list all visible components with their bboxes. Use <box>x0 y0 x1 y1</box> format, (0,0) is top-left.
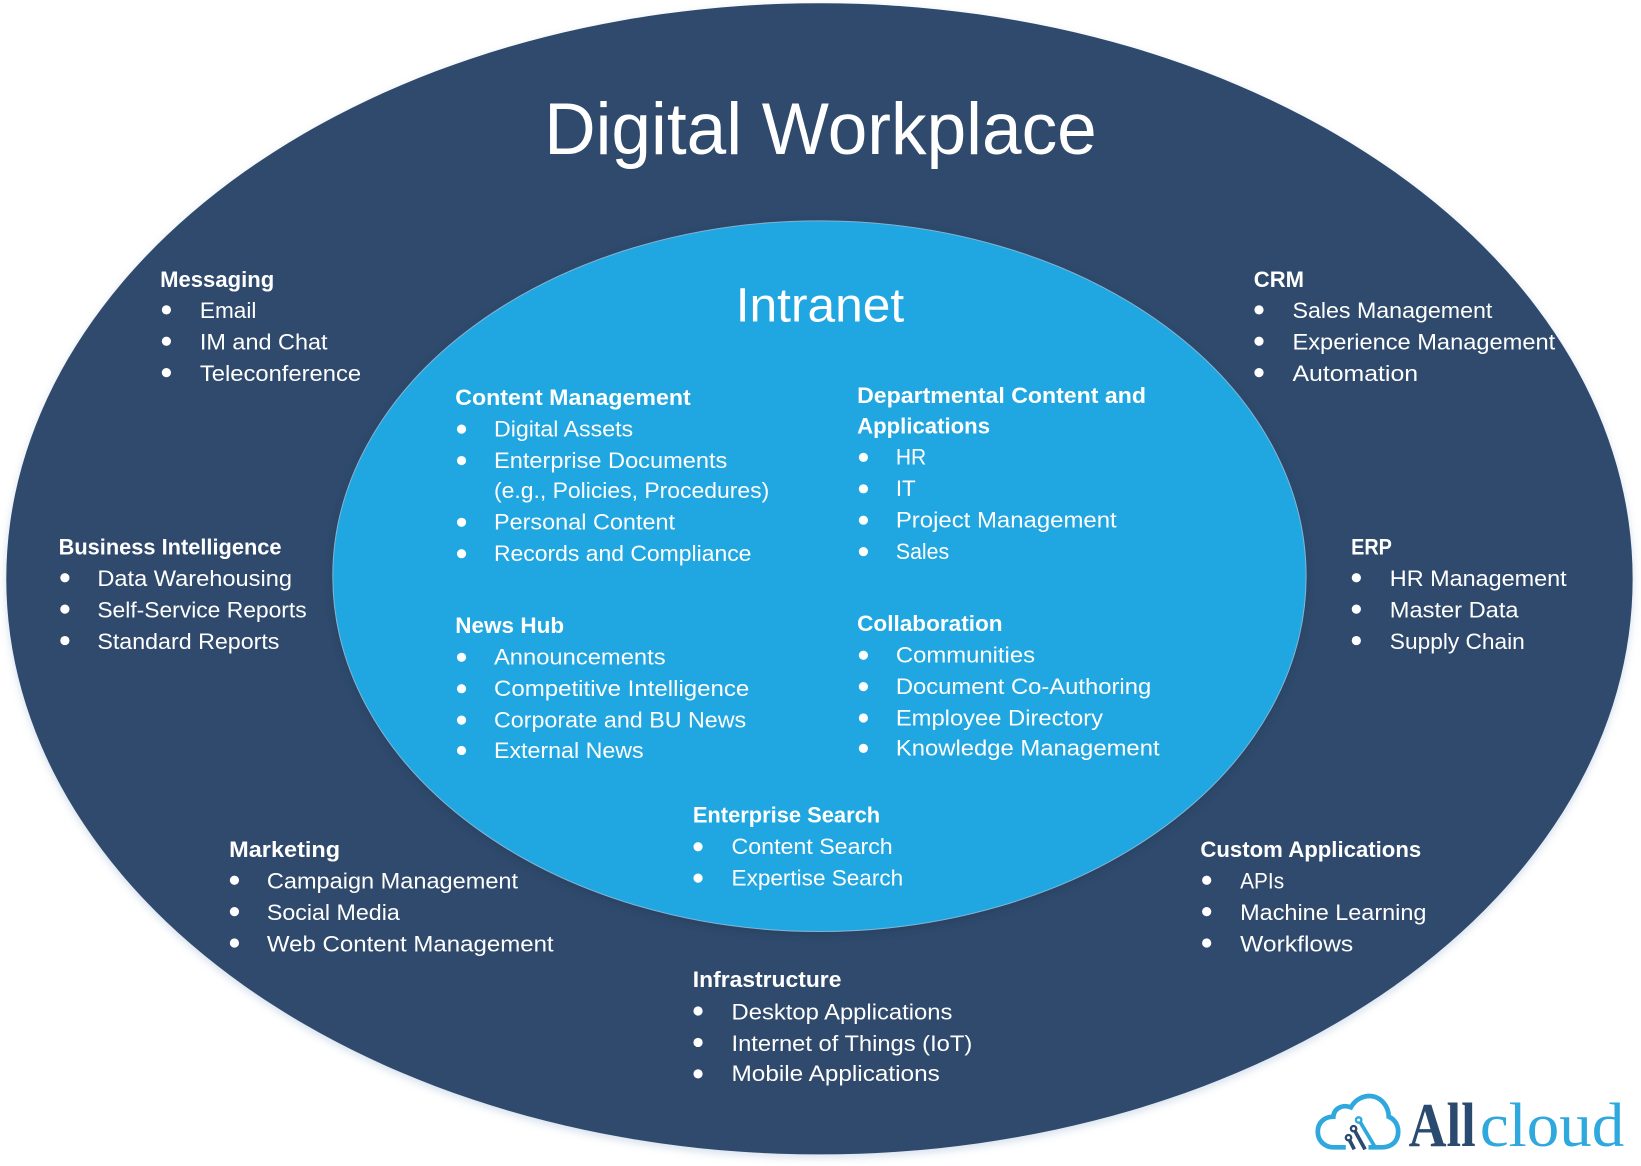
list: Business Intelligence <box>59 535 307 654</box>
list: CRM: CRM <box>1254 267 1304 292</box>
list: Messaging: Email <box>200 298 256 323</box>
list: Business Intelligence: Self-Service Reports <box>97 598 307 623</box>
list: Content Management: Enterprise Documents <box>494 448 727 473</box>
list: Marketing: Marketing <box>229 837 340 862</box>
list: Enterprise Search: Content Search <box>732 834 893 859</box>
list: Content Management: Records and Compliance <box>494 541 751 566</box>
list: Marketing: Campaign Management <box>267 869 519 894</box>
subtitle: intranet: Intranet <box>736 278 905 332</box>
list: Departmental Content and Applications: Applications <box>857 413 990 438</box>
list: Business Intelligence: Standard Reports <box>97 629 279 654</box>
list: CRM: Automation <box>1292 361 1418 386</box>
list: ERP: Master Data <box>1390 598 1519 623</box>
list: Enterprise Search: Enterprise Search <box>693 803 880 828</box>
list: Messaging: Messaging <box>160 267 274 292</box>
list: Collaboration: Knowledge Management <box>896 736 1160 761</box>
list: Custom Applications: Workflows <box>1240 931 1353 956</box>
list: Content Management: (e.g., Policies, Procedures) <box>494 478 769 503</box>
list: Custom Applications: Machine Learning <box>1240 900 1426 925</box>
list: Marketing: Web Content Management <box>267 931 554 956</box>
list: CRM: Sales Management <box>1292 298 1493 323</box>
wordmark: cloud <box>1480 1090 1624 1160</box>
list: ERP: ERP <box>1351 535 1392 560</box>
list: Messaging <box>160 267 361 386</box>
list: Departmental Content and Applications: Sales <box>896 539 949 564</box>
list: Departmental Content and Applications <box>857 383 1146 564</box>
list: Departmental Content and Applications: Project Management <box>896 508 1117 533</box>
list: News Hub: External News <box>494 738 644 763</box>
wordmark: All <box>1409 1090 1476 1160</box>
list: Infrastructure <box>693 967 972 1086</box>
list: Marketing <box>229 837 554 956</box>
list: News Hub: News Hub <box>455 613 564 638</box>
list: Custom Applications <box>1200 837 1426 956</box>
list: Content Management: Digital Assets <box>494 416 633 441</box>
list: CRM: Experience Management <box>1292 330 1556 355</box>
list: Collaboration: Document Co-Authoring <box>896 674 1151 699</box>
list: Departmental Content and Applications: HR <box>896 445 926 470</box>
list: Infrastructure: Mobile Applications <box>732 1061 940 1086</box>
list: Content Management: Content Management <box>455 385 691 410</box>
list: Enterprise Search: Expertise Search <box>732 865 903 890</box>
list: Collaboration: Collaboration <box>857 611 1003 636</box>
list: Messaging: IM and Chat <box>200 330 328 355</box>
list: Departmental Content and Applications: IT <box>896 476 916 501</box>
list: Messaging: Teleconference <box>200 361 361 386</box>
list: News Hub: Corporate and BU News <box>494 707 746 732</box>
list: News Hub: Competitive Intelligence <box>494 676 749 701</box>
list: Content Management <box>455 385 769 566</box>
list: ERP: HR Management <box>1390 566 1567 591</box>
list: News Hub <box>455 613 749 763</box>
list: Departmental Content and Applications: Departmental Content and <box>857 383 1146 408</box>
list: Custom Applications: Custom Applications <box>1200 837 1421 862</box>
list: Infrastructure: Desktop Applications <box>732 999 952 1024</box>
list: ERP: Supply Chain <box>1390 629 1525 654</box>
logo: Allcloud <box>1318 1090 1624 1160</box>
list: Enterprise Search <box>693 803 903 890</box>
list: Business Intelligence: Business Intelligence <box>59 535 282 560</box>
inner ellipse: intranet <box>333 221 1306 934</box>
list: CRM <box>1254 267 1556 386</box>
icon: cloud with circuit <box>1318 1096 1398 1149</box>
list: Collaboration: Employee Directory <box>896 705 1104 730</box>
list: Marketing: Social Media <box>267 900 400 925</box>
list: Infrastructure: Infrastructure <box>693 967 841 992</box>
list: Collaboration: Communities <box>896 643 1035 668</box>
list: ERP <box>1351 535 1567 654</box>
list: Custom Applications: APIs <box>1240 869 1284 894</box>
list: News Hub: Announcements <box>494 645 666 670</box>
title: Digital Workplace <box>544 88 1097 170</box>
list: Content Management: Personal Content <box>494 510 676 535</box>
list: Collaboration <box>857 611 1160 761</box>
list: Business Intelligence: Data Warehousing <box>97 566 292 591</box>
list: Infrastructure: Internet of Things (IoT) <box>732 1031 972 1056</box>
